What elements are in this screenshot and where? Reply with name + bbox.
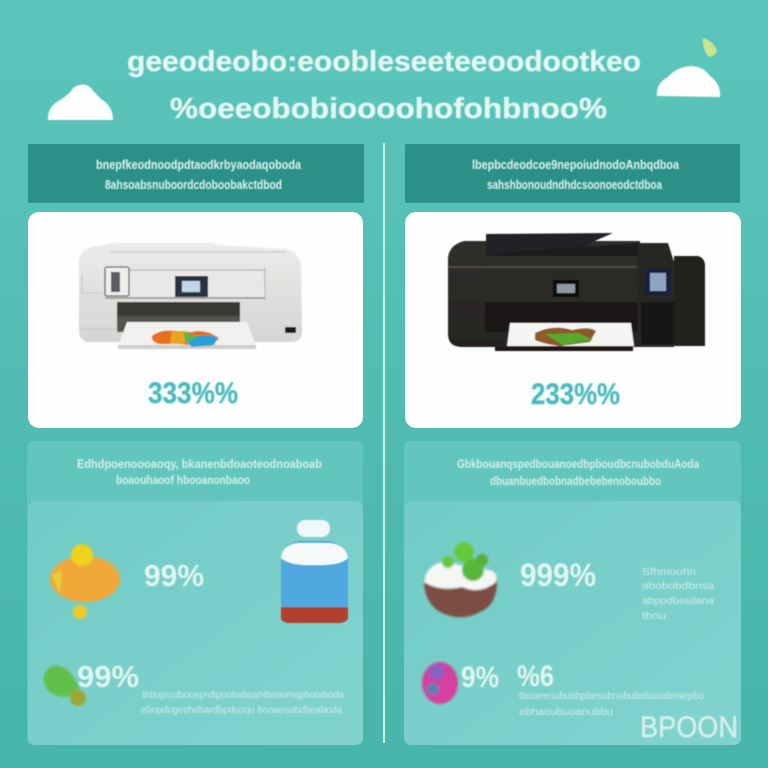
title: geeodeobo:eoobleseeteeoodootkeo [127, 46, 641, 78]
icon: orange ink blob [50, 544, 120, 619]
stat: left printer: 333%% [148, 377, 238, 410]
panel: right header: sahshbonoudndhdcsoonoeodctdboa [487, 178, 663, 192]
stat: left 99%: 99% [144, 558, 204, 593]
text: right side note: Sfhmoohn [642, 567, 696, 578]
text: right lower caption [519, 690, 704, 718]
panel: left inner [28, 501, 363, 745]
panel: right header: lbepbcdeodcoe9nepoiudnodoAnbqdboa [472, 158, 680, 172]
watermark: BPOON [640, 711, 738, 744]
panel: left lower section [27, 441, 363, 745]
text: left section intro: Edhdpoenoooaoqy, bkanenbdoaoteodnoaboab [77, 459, 322, 471]
icon: ink bottle [281, 520, 348, 623]
panel: right lower section [404, 441, 741, 745]
text: right section intro: GbkbouanqspedbouanoedbpboudbcnubobduAoda [457, 459, 700, 471]
title [127, 46, 641, 125]
stat: right second %: %6 [517, 660, 554, 693]
text: left lower caption: ebopdugeohdbardbpduoqu bnoaeoabdbeaboda [141, 704, 342, 716]
text: left lower caption [141, 689, 344, 716]
text: right section intro: dbuanbuedbobnadbebebenoboubbo [490, 476, 661, 488]
icon: magenta ink blob [422, 662, 458, 704]
text: right lower caption: tbuoeeoubuobpbesobnobubobuoabnsepbo [519, 690, 704, 702]
icon: green leaf blob [44, 665, 86, 706]
panel: right inner [404, 501, 741, 745]
divider [383, 143, 385, 743]
text: right lower caption: ebhaoubuoanubbu [519, 706, 613, 718]
text: right side note: tbnu [642, 611, 666, 622]
stat: right 9%: 9% [461, 661, 499, 694]
icon: right cloud with leaf [657, 38, 720, 97]
panel: left printer card [28, 212, 363, 428]
panel: left header [28, 144, 364, 203]
panel: right printer card [405, 212, 741, 428]
stat: left second 99%: 99% [77, 659, 139, 694]
stat: right 999%: 999% [520, 557, 596, 593]
icon: left cloud [48, 84, 113, 120]
panel: left header: bnepfkeodnoodpdtaodkrbyaodaqoboda [96, 158, 302, 172]
text: left lower caption: thbuprcdboueprdtpuobabuahtbsoumapbotaboda [142, 689, 344, 701]
stat: right printer: 233%% [531, 378, 620, 411]
panel: right header [405, 144, 740, 203]
text: right side note: abppdbssdana [642, 596, 714, 607]
text: right section intro [457, 459, 700, 488]
title: %oeeobobioooohofohbnoo% [170, 93, 607, 125]
text: left section intro [77, 459, 322, 487]
icon: soil and leaves bowl [424, 542, 497, 617]
icon: white printer [79, 243, 302, 349]
text: right side note [642, 567, 715, 622]
text: left section intro: boaouhaoof hbooanonbaoo [116, 475, 250, 487]
panel: left header: 8ahsoabsnuboordcdoboobakctdbod [105, 178, 282, 192]
text: right side note: abobobdbnsa [642, 581, 715, 592]
icon: black printer [448, 233, 705, 349]
